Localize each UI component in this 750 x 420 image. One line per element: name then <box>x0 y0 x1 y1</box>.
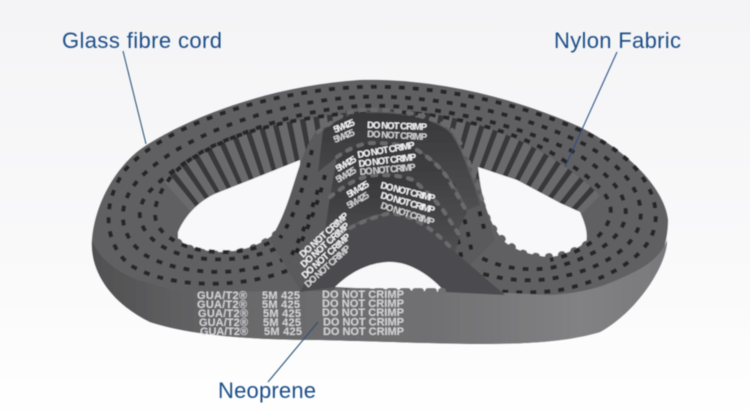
back belt print: 5M 425 <box>334 165 359 186</box>
back belt print: 5M 425 <box>332 117 357 136</box>
front belt print: DO NOT CRIMP <box>323 316 404 328</box>
front belt print: 5M 425 <box>263 317 301 329</box>
belt markings <box>197 117 437 338</box>
back belt print: DO NOT CRIMP <box>367 120 428 133</box>
back belt print: DO NOT CRIMP <box>359 162 417 178</box>
arch opening <box>335 262 445 292</box>
leader line <box>123 51 146 144</box>
front belt print: GUA/T2® <box>198 308 248 320</box>
back belt print: DO NOT CRIMP <box>300 231 354 281</box>
back belt print: 5M 425 <box>345 190 372 212</box>
right opening <box>478 167 587 257</box>
back belt print <box>298 117 437 290</box>
front belt print: GUA/T2® <box>199 317 248 329</box>
arch belt 4 <box>300 213 505 295</box>
front belt print: DO NOT CRIMP <box>322 307 404 319</box>
front belt print: DO NOT CRIMP <box>322 289 404 301</box>
arch belt 1 <box>318 113 480 210</box>
callout: neoprene <box>218 322 318 403</box>
back wall with vertical teeth <box>180 136 582 214</box>
front belt print: GUA/T2® <box>197 299 247 311</box>
back belt print: DO NOT CRIMP <box>379 200 436 228</box>
front belt print: DO NOT CRIMP <box>322 298 404 310</box>
arch tooth edges <box>318 110 484 250</box>
left opening <box>178 160 300 252</box>
front belt print: 5M 425 <box>262 290 300 302</box>
inner belt sides <box>270 108 495 290</box>
back belt print: 5M 425 <box>345 179 372 201</box>
belt coil <box>62 28 681 403</box>
inner belts <box>197 108 505 338</box>
back belt print: DO NOT CRIMP <box>358 152 418 170</box>
leader line <box>565 52 617 167</box>
front belt print: GUA/T2® <box>197 290 247 302</box>
back belt print: DO NOT CRIMP <box>379 180 437 205</box>
front belt band <box>92 240 667 344</box>
front belt print <box>197 289 404 338</box>
callout: glass fibre cord <box>62 28 222 144</box>
label: Neoprene <box>218 378 316 403</box>
back belt print: DO NOT CRIMP <box>303 243 354 290</box>
inner belt teeth <box>280 150 485 262</box>
label: Glass fibre cord <box>62 28 222 53</box>
arch belt 3 <box>322 175 460 252</box>
callout: nylon fabric <box>554 28 681 167</box>
back belt print: DO NOT CRIMP <box>357 140 416 161</box>
front belt print: DO NOT CRIMP <box>323 326 404 338</box>
leader line <box>268 322 318 382</box>
back belt print: 5M 425 <box>334 154 359 175</box>
front belt print: GUA/T2® <box>200 326 248 338</box>
back belt print: DO NOT CRIMP <box>367 129 428 143</box>
arch belt 2 <box>330 143 467 235</box>
tooth rows <box>109 87 656 292</box>
front belt print: 5M 425 <box>263 308 301 320</box>
label: Nylon Fabric <box>554 28 681 53</box>
opening tooth edges <box>178 205 588 257</box>
belt top surface <box>92 80 668 344</box>
back belt print: DO NOT CRIMP <box>379 190 437 217</box>
front belt print: 5M 425 <box>264 326 302 338</box>
arch opening tooth edge <box>337 288 443 294</box>
back belt print: 5M 425 <box>332 127 357 146</box>
front belt print: 5M 425 <box>262 299 300 311</box>
back belt print: DO NOT CRIMP <box>299 220 353 270</box>
back belt print: DO NOT CRIMP <box>298 210 352 260</box>
